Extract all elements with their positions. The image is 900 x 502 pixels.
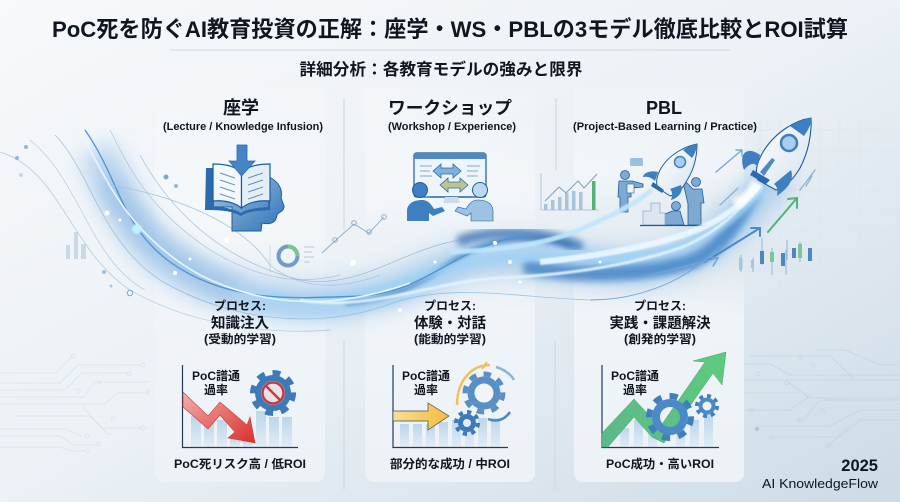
chart label: PoC譜通 [402, 368, 450, 383]
ring marker [127, 290, 133, 296]
panel: workshop process content [390, 299, 514, 471]
gears [649, 396, 717, 438]
rocket trails [450, 183, 758, 262]
circuit pattern: right [745, 350, 900, 448]
line chart deco [322, 215, 386, 253]
title: PoC死を防ぐAI教育投資の正解：座学・WS・PBLの3モデル徹底比較とROI試算 [52, 16, 848, 42]
axes [393, 365, 508, 448]
result text: 部分的な成功 / 中ROI [390, 456, 510, 471]
panel: PBL process content: 過率 [623, 382, 647, 397]
panel: workshop process content: 過率 [414, 382, 438, 397]
red down arrow [183, 392, 255, 443]
chart label: PoC譜通 [611, 368, 659, 383]
up arrows around rocket [650, 150, 815, 275]
panel: PBL process content: 実践・課題解決 [610, 314, 711, 332]
panel: lecture process content: 知識注入 [211, 314, 269, 332]
icon: PBL team [618, 158, 707, 226]
icon: large rocket [742, 118, 811, 196]
chart label: PoC譜通 [192, 368, 240, 383]
heading: lecture: 座学 [223, 97, 259, 118]
heading: PBL [573, 98, 757, 133]
axes [182, 365, 298, 448]
icon: small rocket [643, 144, 697, 200]
panel: workshop process content: 体験・対話 [414, 314, 486, 332]
bars [620, 414, 713, 447]
icon: book entering head [205, 145, 284, 231]
decorative rule under title [170, 49, 730, 51]
circuit pattern: left [0, 354, 150, 453]
bars [191, 411, 292, 447]
panel: workshop card background [365, 262, 535, 482]
icon: mini growth chart [541, 173, 599, 210]
heading: lecture: (Lecture / Knowledge Infusion) [163, 121, 323, 133]
flow wave [0, 125, 780, 331]
decorative grid at right [745, 120, 900, 290]
panel column: lecture (upper) [155, 88, 325, 278]
gear with prohibition [253, 373, 293, 413]
result text: PoC成功・高いROI [606, 456, 714, 471]
process text: プロセス: [634, 299, 686, 313]
panel: lecture card background [155, 262, 325, 482]
small deco chart: left bars [66, 232, 86, 259]
heading: PBL: (Project-Based Learning / Practice) [573, 121, 757, 133]
panel: workshop process content: (能動的学習) [414, 332, 486, 346]
dark band upper [345, 238, 572, 303]
column dividers [344, 98, 556, 490]
result text: PoC死リスク高 / 低ROI [174, 456, 306, 471]
yellow arrow [393, 403, 449, 430]
heading: PBL: PBL [646, 98, 682, 118]
panel column: PBL (upper) [574, 88, 744, 208]
candlestick chart [739, 238, 812, 275]
panel: PBL process content [602, 299, 726, 471]
green up arrow [602, 352, 726, 447]
flow sparkles [104, 210, 692, 312]
dark band lower [530, 195, 752, 274]
scatter dots [15, 145, 178, 288]
icon: workshop [407, 153, 493, 221]
subtitle: 詳細分析：各教育モデルの強みと限界 [300, 59, 583, 79]
gears and cycle arrows [456, 362, 514, 434]
panel: PBL process content: (創発的学習) [624, 332, 696, 346]
panel: lecture process content: 過率 [204, 382, 228, 397]
process text: プロセス: [214, 299, 266, 313]
heading: workshop [388, 98, 516, 133]
panel: PBL card background [574, 262, 744, 482]
pale base band [240, 195, 755, 305]
heading: workshop: (Workshop / Experience) [388, 121, 516, 133]
axes [602, 365, 719, 448]
bars [400, 418, 500, 447]
year: 2025 [841, 457, 878, 475]
heading: lecture [163, 97, 323, 133]
panel column: workshop (upper) [365, 88, 535, 238]
donut chart [270, 245, 314, 272]
process text: プロセス: [424, 299, 476, 313]
heading: workshop: ワークショップ [388, 98, 513, 118]
panel: lecture process content [174, 299, 306, 471]
brand: AI KnowledgeFlow [762, 477, 879, 491]
panel: lecture process content: (受動的学習) [204, 332, 276, 346]
